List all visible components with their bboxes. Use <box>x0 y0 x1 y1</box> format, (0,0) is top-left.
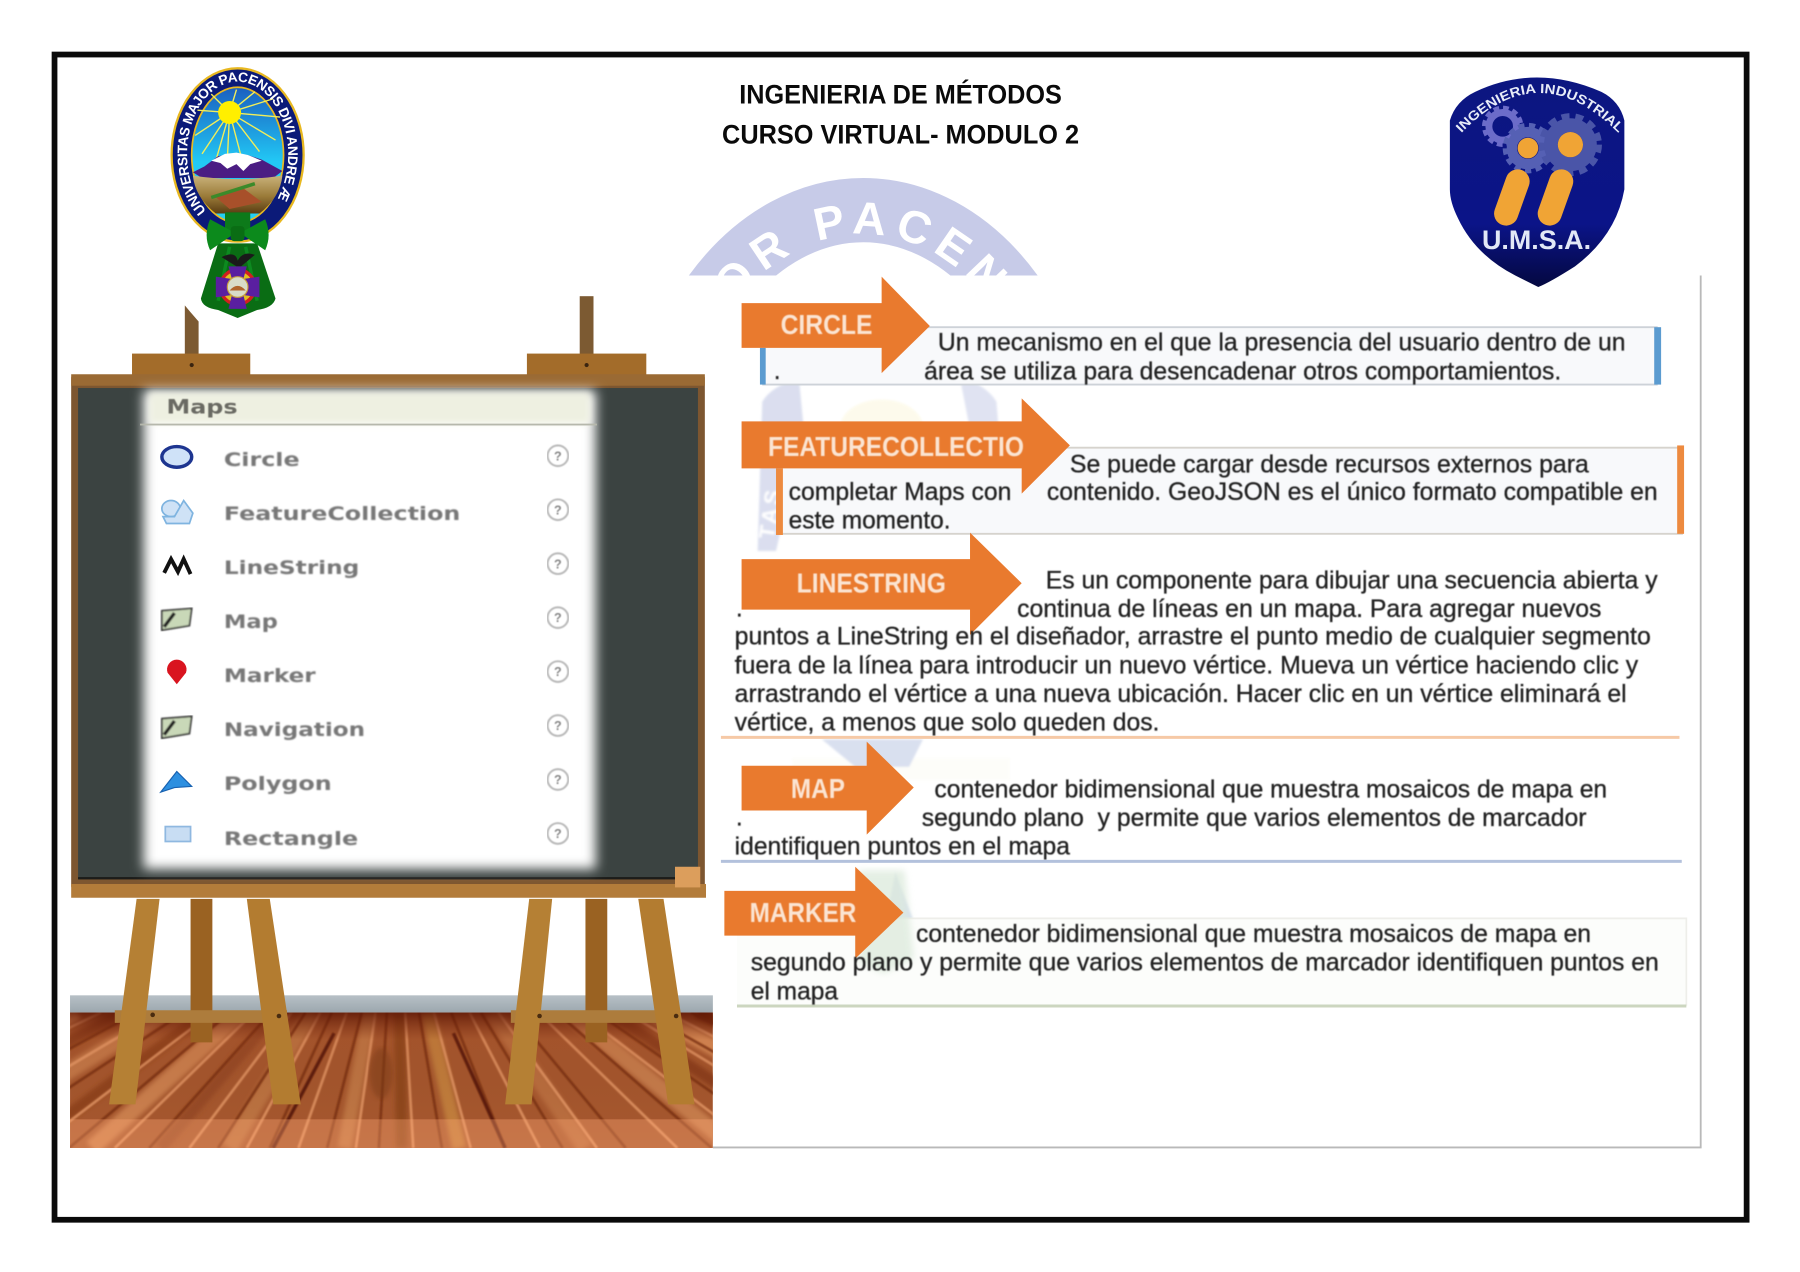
icon: marker <box>167 660 187 684</box>
help icons: ? <box>554 773 562 787</box>
feature text <box>789 451 1658 535</box>
line string text <box>735 567 1658 737</box>
icon: feature collection <box>162 501 193 523</box>
panel: FEATURECOLLECTION <box>742 398 1684 535</box>
marker watermark fragment <box>859 870 914 974</box>
marker text: contenedor bidimensional que muestra mosaicos de mapa en <box>916 921 1591 948</box>
watermark: university seal: OR PACENS <box>718 202 1008 276</box>
title: CURSO VIRTUAL- MODULO 2 <box>722 120 1079 150</box>
line string text: continua de líneas en un mapa. Para agregar nuevos <box>1017 596 1601 623</box>
icon: line string <box>164 559 191 574</box>
faint watermark through panel <box>754 377 1010 953</box>
pegs and top blocks <box>132 296 646 377</box>
help icons: ? <box>554 611 562 625</box>
help icons: ? <box>554 827 562 841</box>
wall strip <box>70 995 713 1013</box>
panel: MARKER <box>724 867 1686 1007</box>
icon: navigation <box>162 716 192 738</box>
panel: definitions background <box>713 276 1701 1148</box>
help icons <box>548 445 568 844</box>
marker box <box>737 918 1686 1007</box>
Maps list items: Marker <box>224 665 316 687</box>
line string text: arrastrando el vértice a una nueva ubicación. Hacer clic en un vértice eliminará el <box>735 681 1627 708</box>
wooden floor <box>70 1012 713 1148</box>
arrow: circle <box>742 277 930 373</box>
circle box <box>760 327 1661 385</box>
line string text: fuera de la línea para introducir un nuevo vértice. Mueva un vértice haciendo clic y <box>735 652 1639 679</box>
arrow: map <box>742 742 914 835</box>
title <box>722 79 1079 150</box>
panel: MAP <box>721 742 1682 863</box>
icon: polygon <box>161 771 192 792</box>
icon: map <box>162 608 192 630</box>
shield U.M.S.A. text: U.M.S.A. <box>1482 225 1591 255</box>
circle text: área se utiliza para desencadenar otros comportamientos. <box>924 358 1561 385</box>
Maps list items <box>224 449 460 850</box>
orange dots and bars <box>1506 132 1583 214</box>
seal ring <box>172 68 304 242</box>
line string heading: LINESTRING <box>797 567 946 598</box>
Maps list items: FeatureCollection <box>224 503 460 525</box>
circle text: . <box>774 358 781 385</box>
map text: contenedor bidimensional que muestra mosaicos de mapa en <box>934 776 1607 803</box>
panel: LINESTRING <box>721 533 1679 739</box>
logo: Ingenieria Industrial shield <box>1450 78 1624 287</box>
Maps list items: LineString <box>224 557 359 579</box>
circle text: Un mecanismo en el que la presencia del usuario dentro de un <box>938 330 1626 357</box>
help icons: ? <box>554 719 562 733</box>
icon: rectangle <box>165 827 191 841</box>
arrow: marker <box>724 867 903 959</box>
marker text: el mapa <box>751 978 838 1005</box>
seal inner scene <box>192 87 284 235</box>
map text: segundo plano y permite que varios elementos de marcador <box>922 805 1586 832</box>
help icons: ? <box>554 665 562 679</box>
marker text: segundo plano y permite que varios elementos de marcador identifiquen puntos en <box>751 950 1659 977</box>
Maps list items: Map <box>224 611 278 633</box>
marker heading: MARKER <box>750 897 856 928</box>
seal lettering: UNIVERSITAS MAJOR PACENSIS DIVI ANDRE Æ <box>178 72 298 216</box>
easel scene <box>70 296 713 1148</box>
board frame <box>71 374 706 898</box>
feature box <box>776 445 1684 535</box>
line string text: Es un componente para dibujar una secuencia abierta y <box>1046 567 1658 594</box>
Maps list items: Polygon <box>224 773 332 795</box>
line string text: . <box>736 595 743 622</box>
line string text: puntos a LineString en el diseñador, arrastre el punto medio de cualquier segmento <box>735 624 1651 651</box>
gears <box>1484 108 1599 173</box>
ribbon and medal <box>201 219 276 318</box>
feature text: Se puede cargar desde recursos externos para <box>1070 451 1589 478</box>
map heading: MAP <box>791 773 845 804</box>
Maps list header: Maps <box>166 395 238 418</box>
Maps list header <box>140 393 597 425</box>
logo: UMSA university seal <box>170 67 305 318</box>
faint watermark through panel: TAS <box>754 485 786 540</box>
feature text: completar Maps con <box>789 479 1011 506</box>
circle heading: CIRCLE <box>781 309 872 340</box>
Maps list items: Rectangle <box>224 828 358 850</box>
shield arc text: INGENIERIA INDUSTRIAL <box>1456 84 1621 133</box>
marker text <box>751 921 1659 1005</box>
help icons: ? <box>554 503 562 517</box>
panel: Maps list <box>143 390 596 869</box>
feature text: contenido. GeoJSON es el único formato compatible en <box>1047 479 1658 506</box>
legs <box>109 899 695 1104</box>
panel: CIRCLE <box>742 277 1661 385</box>
Maps list items: Circle <box>224 449 300 471</box>
map text: . <box>736 804 743 831</box>
circle text <box>774 330 1626 385</box>
map text <box>735 776 1607 861</box>
Maps list items: Navigation <box>224 719 365 741</box>
arrow: feature collection <box>742 398 1070 494</box>
map text: identifiquen puntos en el mapa <box>735 834 1070 861</box>
title: INGENIERIA DE MÉTODOS <box>739 79 1062 109</box>
feature text: este momento. <box>789 508 951 535</box>
help icons: ? <box>554 557 562 571</box>
help icons: ? <box>554 449 562 463</box>
icon: circle <box>162 447 192 467</box>
line string text: vértice, a menos que solo queden dos. <box>735 710 1159 737</box>
arrow: line string <box>742 533 1022 635</box>
watermark: university seal <box>689 178 1038 276</box>
feature heading: FEATURECOLLECTIO <box>768 431 1024 462</box>
